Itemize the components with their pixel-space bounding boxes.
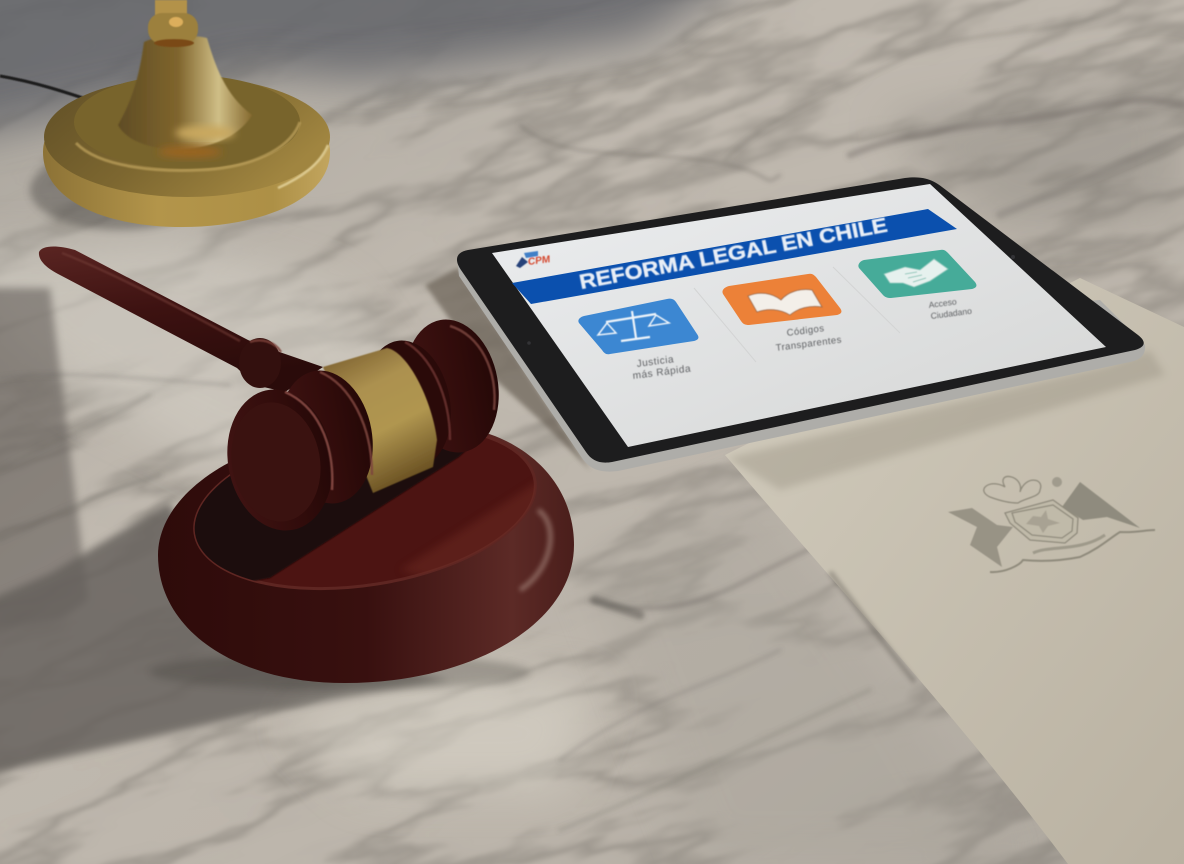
sound block [158,434,574,683]
lamp stem [148,0,198,47]
tile: codes [722,274,841,325]
label: codes [775,323,842,354]
tablet screen [492,184,1106,447]
block top face [183,403,547,611]
brass band [323,348,437,493]
tablet silver edge [457,258,1145,472]
paper document [725,278,1184,864]
condor [1062,482,1140,528]
right ring [356,334,460,474]
icon: handshake [884,259,948,287]
handle [39,246,323,392]
gavel [39,246,574,690]
huemul [948,508,1013,567]
icon: open book [748,289,822,315]
label: access [928,296,973,321]
label: access: Acceso [928,296,957,310]
left ring [269,363,383,511]
tile: access [858,250,976,298]
lamp cone [118,35,252,149]
brass lamp base [30,0,330,230]
right cap [395,312,509,460]
logo: CPM [528,254,550,268]
embossed coat of arms [948,476,1155,572]
gavel head [216,312,509,539]
tablet [425,177,1145,472]
tile: justice [578,299,698,354]
lamp base top [44,77,330,197]
label: access: Ciudadano [930,306,973,321]
label: codes: Transparentes [775,334,842,354]
label: codes: Códigos [786,323,825,339]
ribbon [990,530,1155,572]
shield [1005,500,1078,543]
tablet body [457,177,1144,463]
sound block shadow [150,654,530,690]
plumes [984,476,1041,503]
icon: scales [598,311,669,341]
logo [516,251,550,268]
header band [512,209,957,304]
star [1026,510,1060,533]
label: justice: más Rápida [632,363,692,382]
block rim highlight [520,510,550,590]
handle collar [239,338,281,388]
lamp base rim [43,80,330,227]
column separators [694,267,900,362]
label: justice: Justicia [636,354,675,370]
label: justice [632,354,692,382]
title: REFORMA LEGAL EN CHILE [578,215,889,294]
lamp cord [0,76,95,102]
camera dots [527,255,1015,345]
lamp base step [74,75,300,169]
left cap [216,381,344,539]
